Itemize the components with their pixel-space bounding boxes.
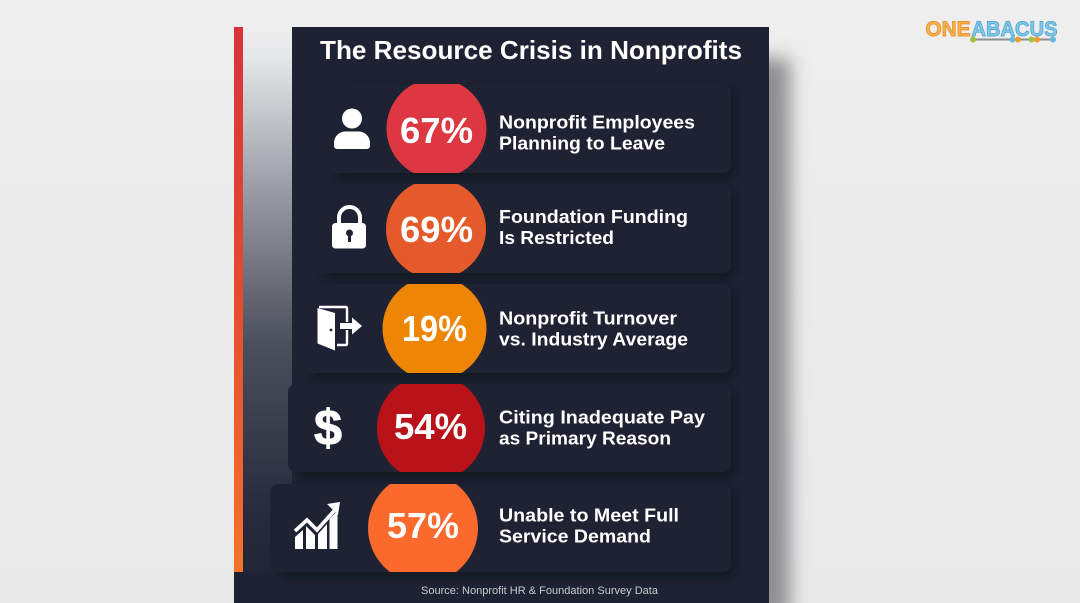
infographic canvas (234, 21, 1058, 603)
row 1 label: Planning to Leave (499, 134, 665, 154)
row 1 label: Nonprofit Employees (499, 112, 695, 132)
logo: OneAbacus (926, 18, 1058, 42)
row 5: service demand (270, 484, 736, 579)
row 5 card (270, 484, 731, 572)
row 3 percent circle (382, 284, 486, 373)
row 4 percent value: 54% (394, 406, 467, 447)
row 1 card (326, 84, 731, 173)
panel shadow (700, 58, 790, 603)
row 4 card (288, 384, 731, 472)
row 4: inadequate pay (288, 384, 736, 479)
row 5 label: Unable to Meet Full (499, 506, 679, 526)
row 2 percent circle (386, 184, 486, 273)
logo: OneAbacus: ABACUS (972, 18, 1058, 41)
row 4 label: as Primary Reason (499, 428, 671, 448)
row 4 percent circle (377, 384, 485, 472)
row 1 percent value: 67% (400, 110, 473, 151)
logo: OneAbacus: ONE (926, 18, 970, 41)
row 5 card shadow (281, 489, 734, 577)
icon: person (334, 108, 370, 149)
row 3 percent value: 19% (402, 308, 467, 349)
row 4 card shadow (299, 389, 734, 477)
left accent bar (234, 27, 243, 572)
row 2 card (313, 184, 731, 273)
left gradient strip (243, 27, 292, 603)
title: The Resource Crisis in Nonprofits (320, 35, 742, 65)
icon: dollar sign: $ (314, 400, 342, 456)
icon: padlock (332, 207, 366, 248)
row 1 percent circle (386, 84, 486, 173)
row 5 percent circle (368, 484, 478, 572)
row 2 percent value: 69% (400, 209, 473, 250)
row 3: turnover (301, 276, 734, 380)
row 3 card shadow (312, 289, 734, 378)
row 2 label: Foundation Funding (499, 207, 688, 227)
icon: door with exit arrow (318, 307, 362, 350)
row 4 label: Citing Inadequate Pay (499, 408, 705, 428)
main dark panel (292, 27, 769, 603)
bottom-left panel base (234, 572, 292, 603)
row 5 percent value: 57% (387, 505, 459, 546)
row 2: restricted funding (313, 179, 734, 279)
row 2 label: Is Restricted (499, 228, 614, 248)
icon: rising bar chart with arrow (295, 502, 340, 549)
row 3 label: Nonprofit Turnover (499, 308, 677, 328)
row 1 card shadow (337, 89, 734, 178)
row 3 label: vs. Industry Average (499, 330, 688, 350)
row 3 card (301, 284, 731, 373)
row 1: employees planning to leave (326, 78, 734, 178)
row 5 label: Service Demand (499, 526, 651, 546)
row 2 card shadow (324, 189, 734, 278)
source note: Source: Nonprofit HR & Foundation Survey Data (421, 585, 659, 597)
